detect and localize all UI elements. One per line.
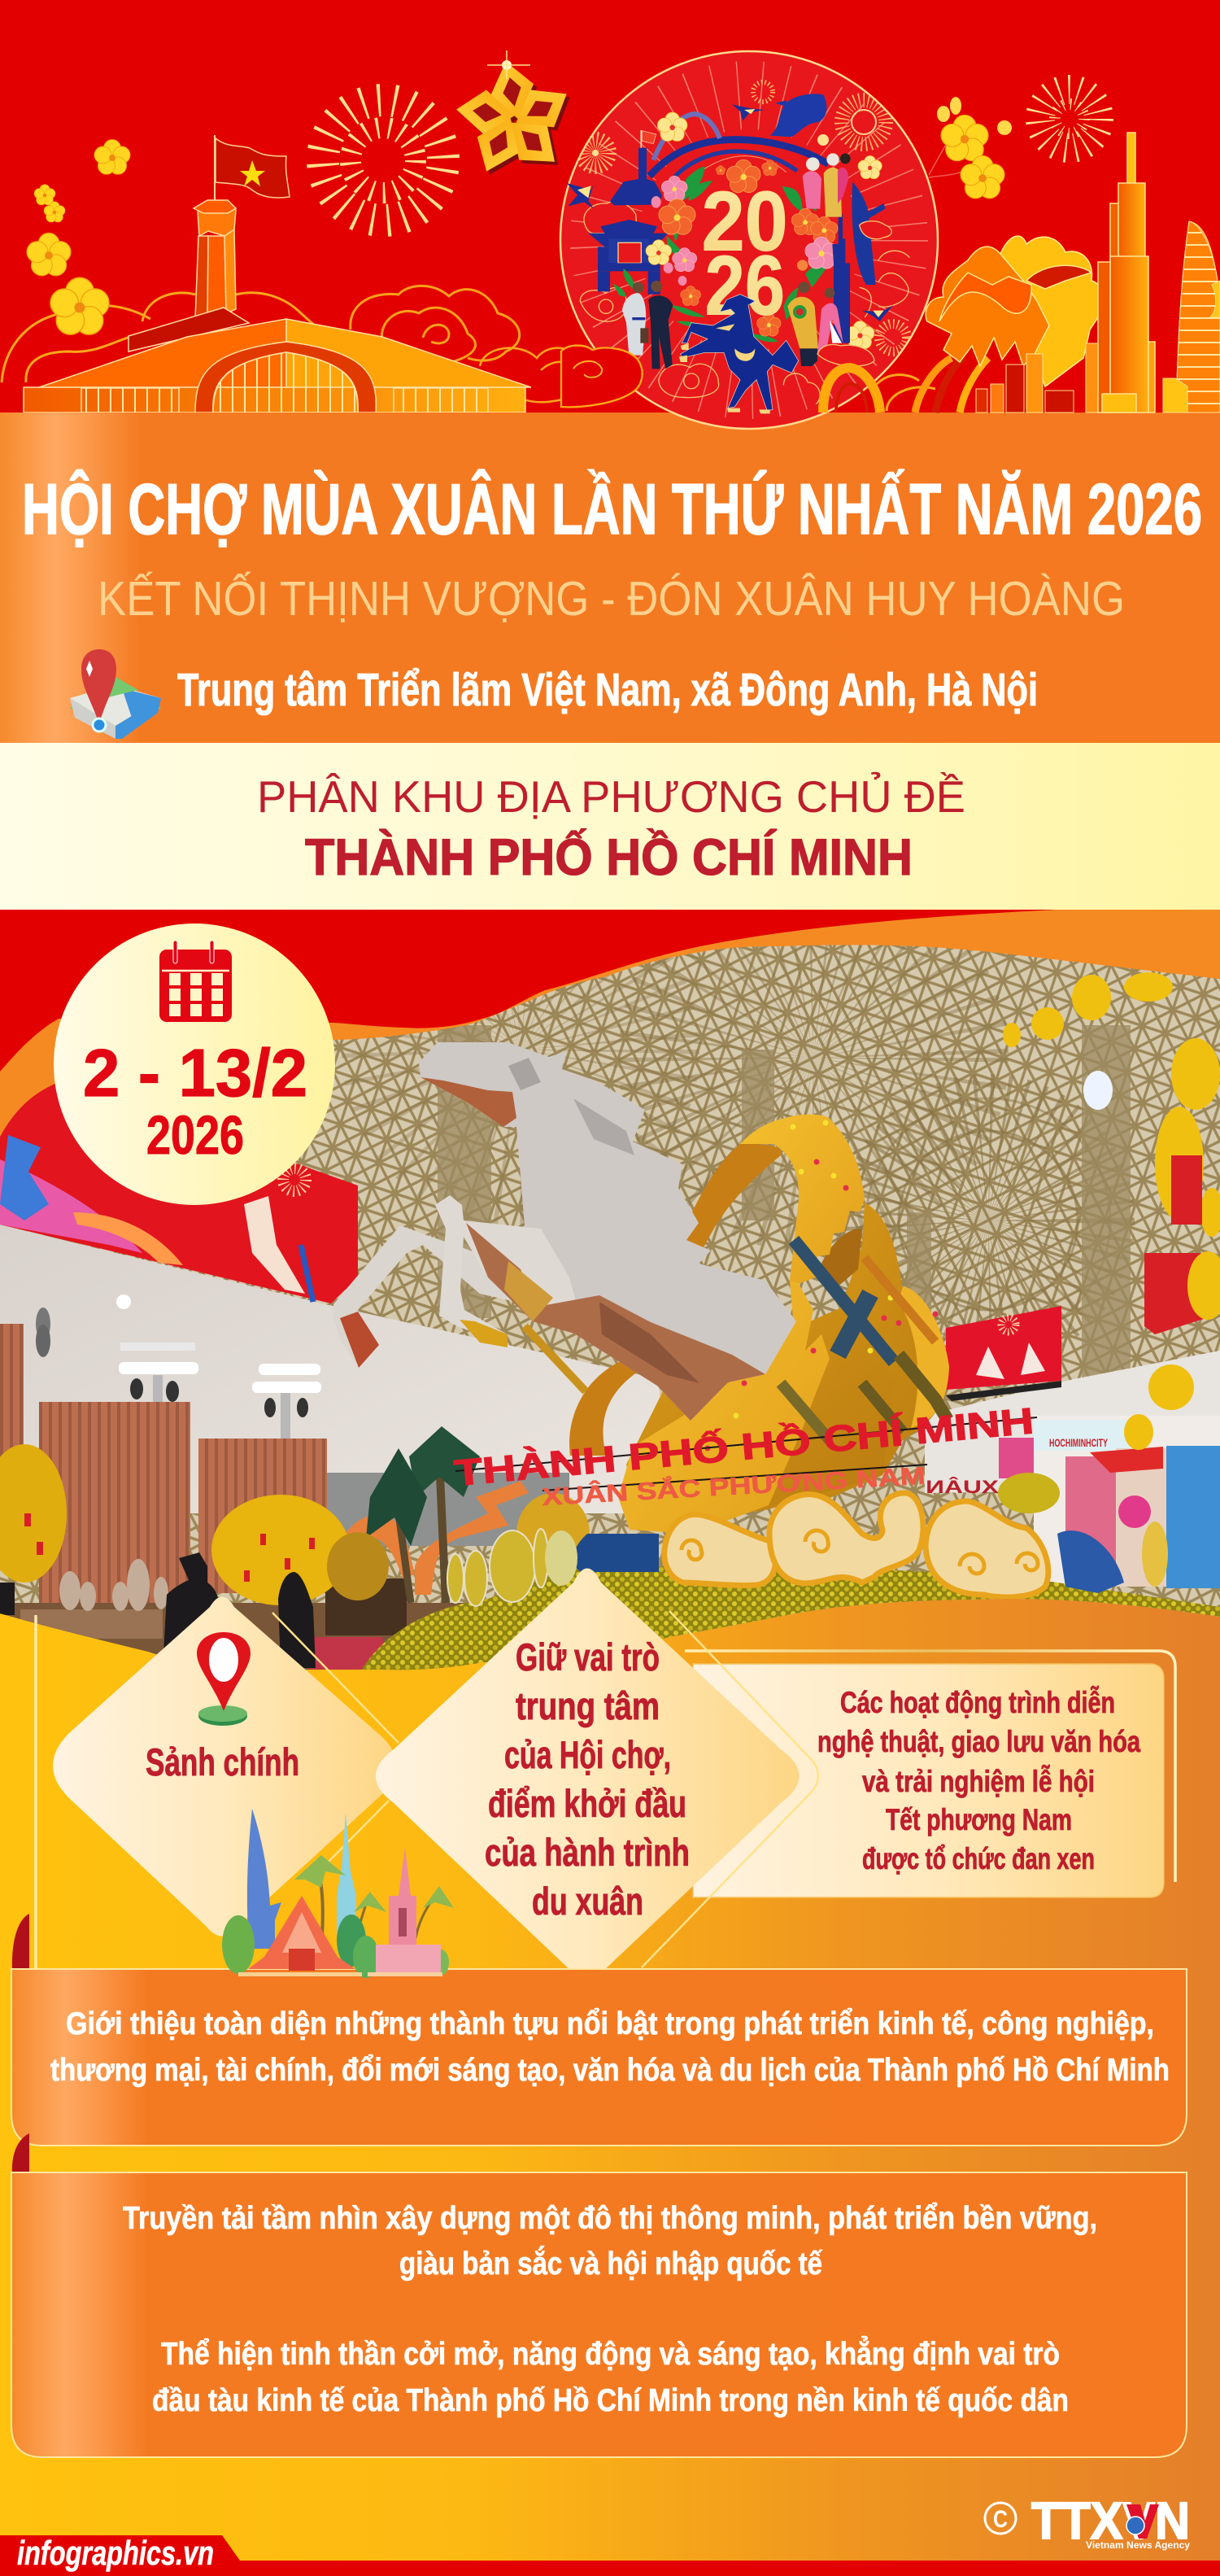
- icon: calendar: [159, 941, 232, 1022]
- booths right: HOCHIMINHCITY: [1049, 1436, 1108, 1449]
- Landmark 81 tower: [337, 1812, 356, 1941]
- date range: 2 - 13/2: [83, 1035, 307, 1111]
- footer tab with website: infographics.vn: [17, 2534, 214, 2572]
- icon: location pin: [197, 1632, 251, 1726]
- family group: [803, 153, 851, 217]
- sign text on sculpture: XUÂN SẮC PHƯƠNG NAM: [541, 1462, 926, 1511]
- cream subtitle band: [0, 743, 1220, 910]
- date circle: [54, 923, 335, 1205]
- terracotta pillars: [0, 1324, 327, 1618]
- right crescents: [899, 1286, 949, 1428]
- pink cathedral: [368, 1847, 442, 1976]
- panel: vision: [11, 2172, 1187, 2457]
- right LED screen: [946, 1306, 1061, 1401]
- Landmark 81 tower: [1098, 133, 1155, 413]
- central role text: [485, 1635, 690, 1923]
- left vertical gold line: [34, 1615, 37, 1969]
- performances text: [817, 1686, 1140, 1875]
- central role text: du xuân: [532, 1880, 643, 1923]
- photo: Ho Chi Minh City pavilion with silver horse: [0, 936, 1220, 1676]
- arch arcs: [823, 368, 880, 413]
- performances text: nghệ thuật, giao lưu văn hóa: [817, 1725, 1140, 1758]
- stage lights: [36, 1295, 321, 1443]
- yellow apricot trees: [0, 1444, 590, 1605]
- flag: [215, 135, 290, 202]
- front leg B: [435, 1195, 586, 1347]
- red banner: [1144, 1253, 1206, 1334]
- icon: gold five-petal emblem: [453, 50, 581, 184]
- emblem petals: [453, 59, 577, 181]
- golden ring sculpture: [525, 1115, 949, 1534]
- white wall left: [0, 1225, 667, 1513]
- small gold-lined clouds: [580, 251, 909, 404]
- tower shaft: [129, 200, 249, 351]
- bottom red strip: [0, 2561, 1220, 2576]
- cloud outline lower: [877, 375, 935, 411]
- subtitle: Ho Chi Minh City: THÀNH PHỐ HỒ CHÍ MINH: [305, 828, 913, 886]
- gold backing behind horse rear: [626, 1308, 882, 1513]
- firework left: [315, 92, 451, 229]
- icon: map pin: [70, 649, 161, 739]
- silver horse sculpture: [333, 1042, 796, 1421]
- front crescent: [740, 1115, 865, 1284]
- booths right: [926, 1416, 1220, 1588]
- diamond thin gold outlines: [272, 1611, 818, 1967]
- vision text: Truyền tải tầm nhìn xây dựng một đô thị thông minh, phát triển bền vững,: [123, 2201, 1097, 2236]
- flag tower: [24, 135, 531, 413]
- orange arches behind palms: [333, 1481, 529, 1595]
- icon: apricot blossom branch right: [929, 97, 1012, 199]
- floor and booths: [0, 1559, 504, 1676]
- circle contents drawn in zoomed coordinates: [561, 94, 909, 413]
- slogan: KẾT NỐI THỊNH VƯỢNG - ĐÓN XUÂN HUY HOÀNG: [98, 572, 1125, 626]
- white wall right: [925, 1351, 1220, 1493]
- lower gold mass: [618, 1281, 830, 1534]
- hanging blossoms: [1003, 972, 1220, 1450]
- sign text on sculpture: [452, 1399, 1037, 1511]
- red cloud lower left: [561, 346, 643, 407]
- blue hall arch: [649, 140, 828, 177]
- trees: [222, 1915, 449, 1978]
- firework right: [1040, 90, 1099, 148]
- emblem spark: [487, 50, 530, 79]
- back rings with stripes: [686, 1144, 782, 1247]
- horse muzzle and neck shade: [420, 1077, 516, 1127]
- central role text: điểm khởi đầu: [488, 1782, 686, 1825]
- sign text on sculpture: THÀNH PHỐ HỒ CHÍ MINH: [452, 1399, 1035, 1494]
- red cloud below couple: [817, 344, 874, 366]
- skyline right: [823, 133, 1220, 413]
- businessmen: [622, 281, 673, 369]
- spirit text: [152, 2335, 1069, 2418]
- lower section background: [0, 1595, 1220, 2561]
- orange wave over photo: [0, 910, 1220, 1137]
- palm: [294, 1855, 454, 1953]
- panel: achievements: [11, 1969, 1187, 2146]
- performances text: Các hoạt động trình diễn: [840, 1686, 1115, 1719]
- sun rays in circle: [583, 82, 907, 385]
- icon: apricot blossoms left: [27, 140, 130, 334]
- central role text: của hành trình: [485, 1831, 690, 1874]
- red folded ribbon tab 1: [12, 1914, 29, 1969]
- label: main hall: Sảnh chính: [146, 1740, 299, 1784]
- central role text: Giữ vai trò: [516, 1635, 660, 1679]
- steel truss ceiling: [0, 936, 1220, 1635]
- golden cloud decorations: [447, 1493, 1168, 1606]
- performances text: và trải nghiệm lễ hội: [862, 1765, 1095, 1798]
- orange background behind wave: [0, 910, 1220, 1121]
- icon: Ho Chi Minh City landmarks: [222, 1809, 454, 1978]
- ring dots: [704, 1159, 939, 1452]
- blue temple gate: [588, 220, 669, 295]
- vision text: giàu bản sắc và hội nhập quốc tế: [399, 2246, 822, 2281]
- TTXVN wordmark: TTXVN: [1031, 2491, 1190, 2550]
- vision text: [123, 2201, 1097, 2281]
- birds: [567, 104, 893, 321]
- Bitexco tower: [1163, 221, 1220, 413]
- emblem circle 2026: [560, 51, 938, 429]
- wreath flowers: [646, 112, 882, 349]
- emblem petal hollows: [471, 76, 557, 160]
- spirit text: đầu tàu kinh tế của Thành phố Hồ Chí Minh trong nền kinh tế quốc dân: [152, 2383, 1069, 2418]
- blue fort and flag: [610, 130, 662, 205]
- year 2026: 26: [705, 239, 785, 334]
- red folded ribbon tab 2: [12, 2133, 29, 2172]
- spirit text: Thể hiện tinh thần cởi mở, năng động và sáng tạo, khẳng định vai trò: [161, 2335, 1060, 2372]
- red wave: [0, 910, 1057, 1072]
- diamond: central role: [376, 1569, 799, 1987]
- orange temple: [238, 1896, 362, 1976]
- performances text: được tổ chức đan xen: [862, 1842, 1095, 1875]
- year: 2026: [146, 1105, 244, 1166]
- brown underbelly: [466, 1223, 765, 1421]
- subtitle: zone theme: PHÂN KHU ĐỊA PHƯƠNG CHỦ ĐỀ: [257, 771, 965, 822]
- red cloud behind temple: [584, 201, 637, 234]
- couple in ao dai: [787, 282, 843, 366]
- palm trees: [366, 1426, 480, 1603]
- year 2026: [702, 175, 788, 334]
- bird motifs: [525, 1240, 948, 1440]
- central role text: của Hội chợ,: [504, 1733, 671, 1776]
- blue dragon: [653, 94, 826, 160]
- left LED screen: [0, 1084, 358, 1303]
- orange title band: [0, 413, 1220, 743]
- diamond: main hall: [53, 1596, 397, 1936]
- achievements text: [50, 2006, 1170, 2088]
- year 2026: 20: [702, 175, 788, 269]
- green leaves: [612, 167, 828, 342]
- horse body and mane: [419, 1042, 796, 1421]
- emblem shadow: [456, 62, 581, 184]
- copyright mark: C: [993, 2506, 1008, 2533]
- blue horse: [679, 295, 799, 413]
- front leg A: [333, 1225, 537, 1368]
- clouds left: [2, 286, 600, 402]
- people silhouettes: [0, 1552, 316, 1668]
- Bitexco tower: [247, 1809, 281, 1949]
- blue Bitexco tower and Landmark tower: [832, 181, 891, 343]
- exhibition hall building: [24, 319, 531, 413]
- header illustration: [2, 50, 1099, 413]
- small buildings: [976, 343, 1106, 413]
- lion dragon head: [915, 236, 1102, 413]
- performances text: Tết phương Nam: [886, 1803, 1072, 1836]
- TTXVN logo: [985, 2491, 1191, 2551]
- copyright mark: [985, 2503, 1016, 2534]
- grey hall behind palms: [325, 1473, 569, 1546]
- booths right: XUÂN: [926, 1477, 999, 1497]
- yellow flower bed: [358, 1566, 1220, 1676]
- panel: performances: [685, 1651, 1175, 1897]
- Vietnam News Agency: Vietnam News Agency: [1086, 2541, 1191, 2551]
- central role text: trung tâm: [516, 1684, 660, 1727]
